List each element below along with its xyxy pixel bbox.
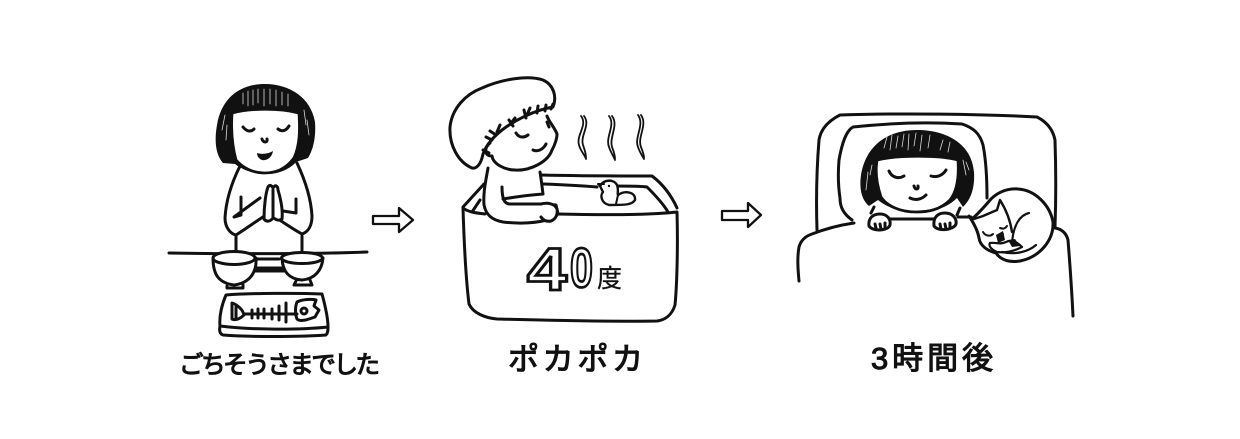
steam (579, 115, 644, 160)
caption: 3時間後 (871, 341, 993, 376)
right hand (934, 213, 956, 230)
temperature 40 (527, 236, 622, 303)
shower cap (450, 78, 555, 168)
sleeping girl head (860, 130, 974, 212)
caption: ごちそうさまでした (179, 351, 380, 379)
bowl right (282, 252, 323, 285)
arrow 1 (373, 208, 413, 232)
sleeping cat (969, 189, 1053, 262)
temperature 40: 4 (527, 236, 568, 303)
fish skeleton on plate (220, 293, 328, 336)
shoulders (871, 207, 960, 215)
place mat (255, 259, 285, 271)
panel: girl and cat asleep (798, 114, 1073, 376)
panel: girl after dinner (169, 84, 380, 379)
girl body in bath (484, 168, 558, 223)
temperature 40: 度 (597, 265, 622, 293)
headboard (817, 114, 1056, 230)
blanket (798, 217, 1073, 316)
girl head with bob hair (216, 84, 315, 174)
girl body with praying arms (225, 163, 312, 252)
tub back rim (463, 175, 677, 212)
temperature 40: 0 (570, 236, 593, 299)
bathtub (463, 208, 677, 321)
left hand (869, 214, 890, 230)
bowl left (213, 252, 256, 288)
table line (169, 252, 367, 254)
girl head profile (486, 116, 557, 170)
pillow (838, 123, 987, 220)
panel: girl in bath (450, 78, 677, 377)
caption: ポカポカ (508, 342, 643, 377)
arrow 2 (722, 203, 761, 227)
rubber duck (598, 181, 635, 205)
